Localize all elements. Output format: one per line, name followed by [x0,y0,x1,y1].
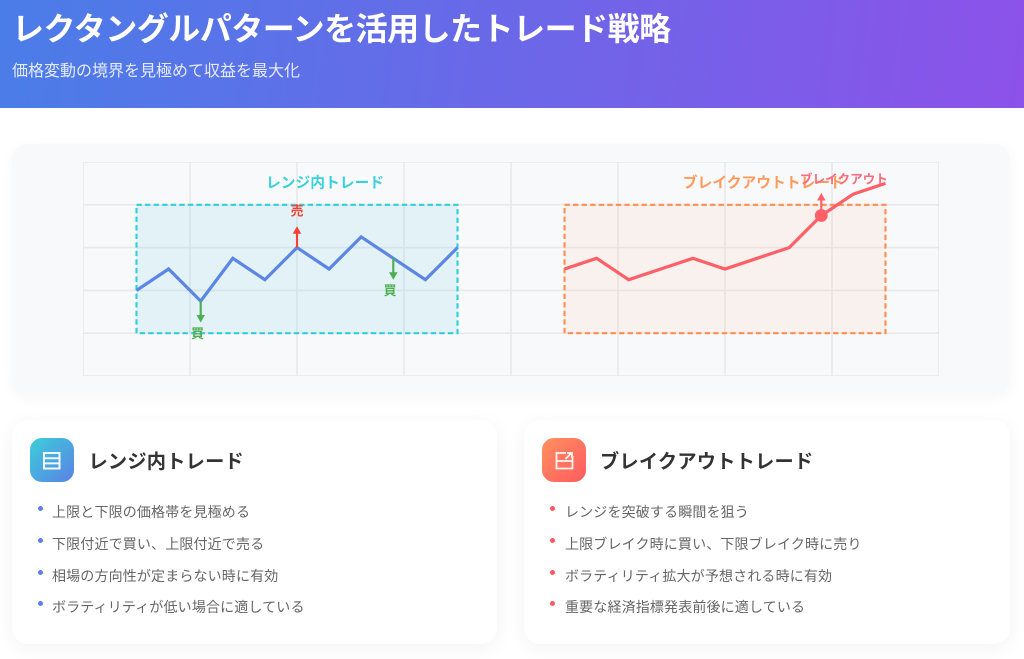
item 3: 相場の方向性が定まらない時に有効 [52,568,278,584]
label: range trade: レンジ内トレード [266,175,384,192]
range box: breakout trade [564,205,886,333]
item 3: ボラティリティ拡大が予想される時に有効 [565,568,832,584]
header banner [0,0,1024,108]
label: buy right: 買 [384,283,397,298]
label: breakout trade: ブレイクアウトトレード [683,174,845,192]
chart: rectangle pattern diagrams [83,162,939,376]
breakout point marker [815,209,828,222]
arrow: sell [293,226,301,248]
title: レクタングルパターンを活用したトレード戦略 [12,11,671,47]
heading: レンジ内トレード [88,452,244,473]
icon: breakout [542,438,586,482]
label: breakout: ブレイクアウト [800,171,888,186]
item 2: 下限付近で買い、上限付近で売る [52,536,264,552]
item 4: ボラティリティが低い場合に適している [52,599,305,615]
panel: breakout trade card [524,420,1010,644]
item 2: 上限ブレイク時に買い、下限ブレイク時に売り [565,536,862,552]
price line: breakout trade [564,183,886,280]
heading: ブレイクアウトトレード [600,452,813,473]
item 1: 上限と下限の価格帯を見極める [52,504,250,520]
label: sell: 売 [291,203,304,218]
icon: range [30,438,74,482]
arrow: buy right [389,258,398,280]
panel: range trade card [12,420,497,644]
arrow: breakout [817,193,826,216]
price line: range trade [136,237,458,301]
subtitle: 価格変動の境界を見極めて収益を最大化 [12,63,300,80]
label: buy left: 買 [191,326,204,341]
arrow: buy left [196,301,205,322]
item 4: 重要な経済指標発表前後に適している [565,599,805,615]
item 1: レンジを突破する瞬間を狙う [565,504,749,520]
panel: chart area [12,144,1010,394]
range box: range trade [136,205,458,333]
